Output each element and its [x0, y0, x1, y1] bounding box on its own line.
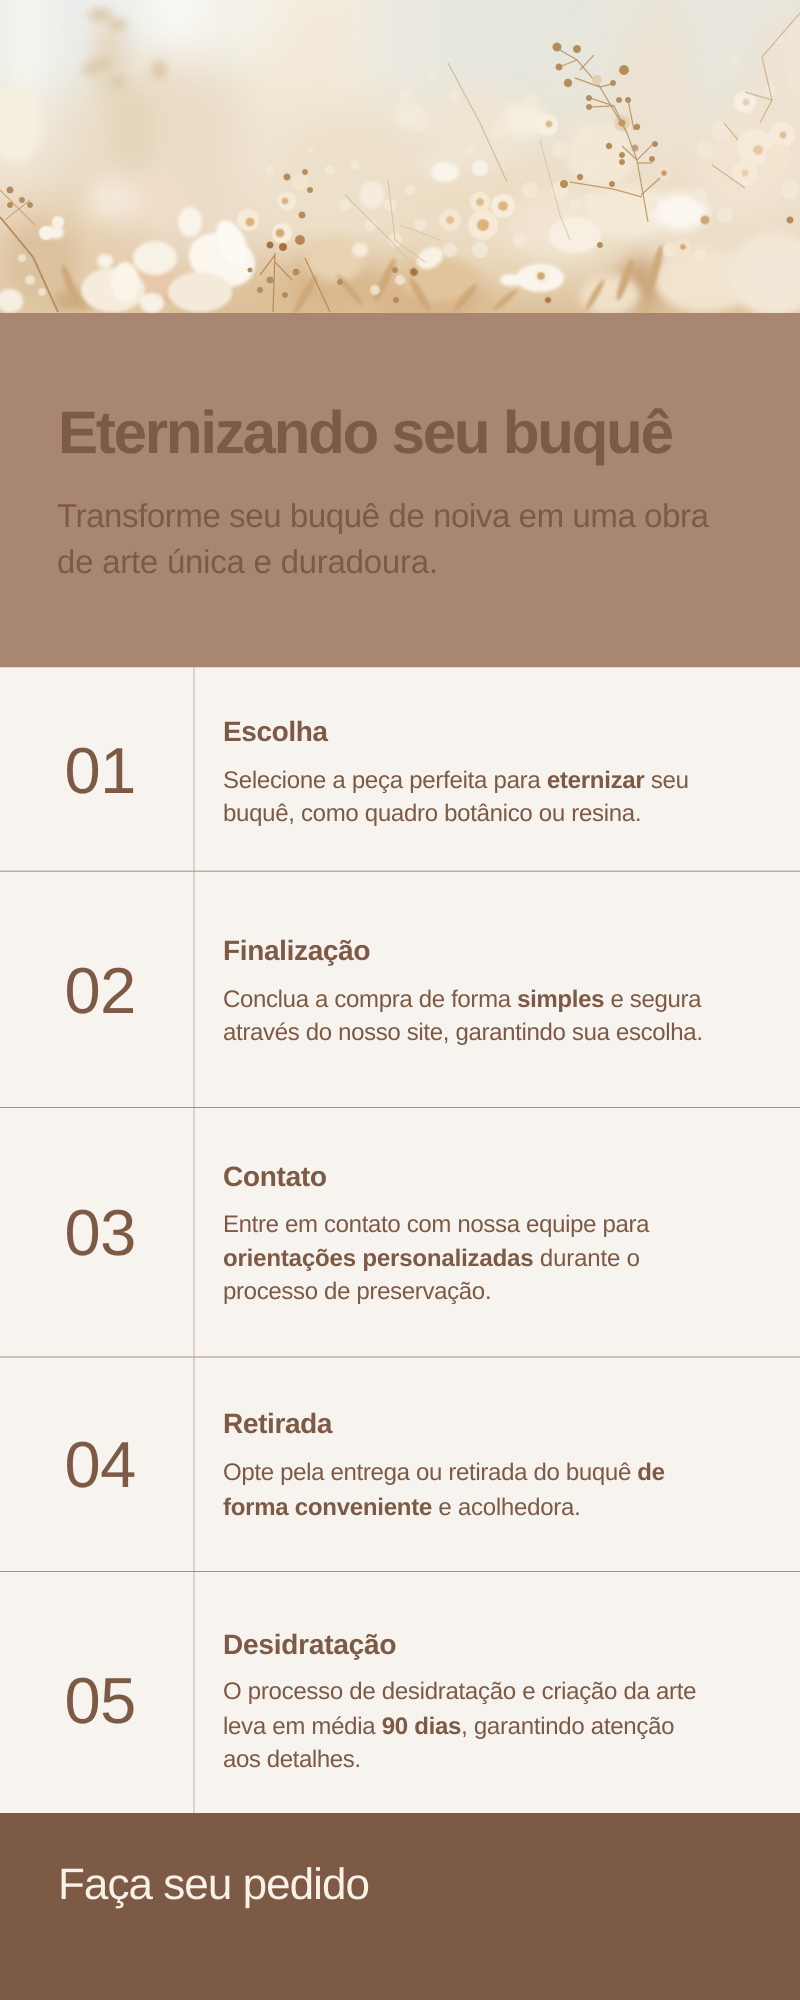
step 04 — [64, 1408, 665, 1521]
step 01: 01 — [64, 734, 136, 807]
stems — [0, 13, 800, 312]
step 05: O processo de desidratação e criação da arte — [223, 1678, 696, 1705]
step 03 — [64, 1161, 650, 1305]
step 03: orientações personalizadas durante o — [223, 1245, 640, 1272]
step 05: leva em média 90 dias, garantindo atenção — [223, 1713, 674, 1740]
step 02 — [64, 935, 703, 1046]
step 01: buquê, como quadro botânico ou resina. — [223, 800, 642, 827]
white petals — [0, 162, 601, 313]
title: Eternizando seu buquê — [58, 399, 674, 466]
small blossom texture — [18, 36, 799, 296]
step 02: Finalização — [223, 935, 370, 966]
step 04: 04 — [64, 1428, 136, 1501]
step 03: Contato — [223, 1161, 327, 1192]
step 01: Escolha — [223, 716, 328, 747]
tan streaks in the lower bouquet — [59, 244, 666, 316]
panel: steps — [0, 667, 800, 1813]
step 01 — [64, 716, 689, 827]
flower heads — [39, 91, 795, 303]
call to action: Faça seu pedido — [58, 1860, 370, 1909]
step 05 — [64, 1629, 696, 1773]
subtitle: de arte única e duradoura. — [57, 543, 438, 580]
step 03: 03 — [64, 1196, 136, 1269]
subtitle: Transforme seu buquê de noiva em uma obra — [57, 497, 710, 534]
step 01: Selecione a peça perfeita para eternizar seu — [223, 767, 689, 794]
subtitle — [57, 497, 710, 580]
step 02: através do nosso site, garantindo sua escolha. — [223, 1019, 703, 1046]
step 02: 02 — [64, 954, 136, 1027]
seed buds — [6, 42, 794, 303]
footer band — [0, 1813, 800, 2000]
step 02: Conclua a compra de forma simples e segura — [223, 986, 702, 1013]
step 03: processo de preservação. — [223, 1278, 492, 1305]
step 04: Retirada — [223, 1408, 333, 1439]
step 03: Entre em contato com nossa equipe para — [223, 1211, 650, 1238]
header panel — [0, 313, 800, 667]
step 04: Opte pela entrega ou retirada do buquê de — [223, 1459, 665, 1486]
hero photo: dried flowers — [0, 0, 800, 325]
step 05: 05 — [64, 1664, 136, 1737]
step 05: Desidratação — [223, 1629, 396, 1660]
step 04: forma conveniente e acolhedora. — [223, 1494, 581, 1521]
step 05: aos detalhes. — [223, 1746, 361, 1773]
